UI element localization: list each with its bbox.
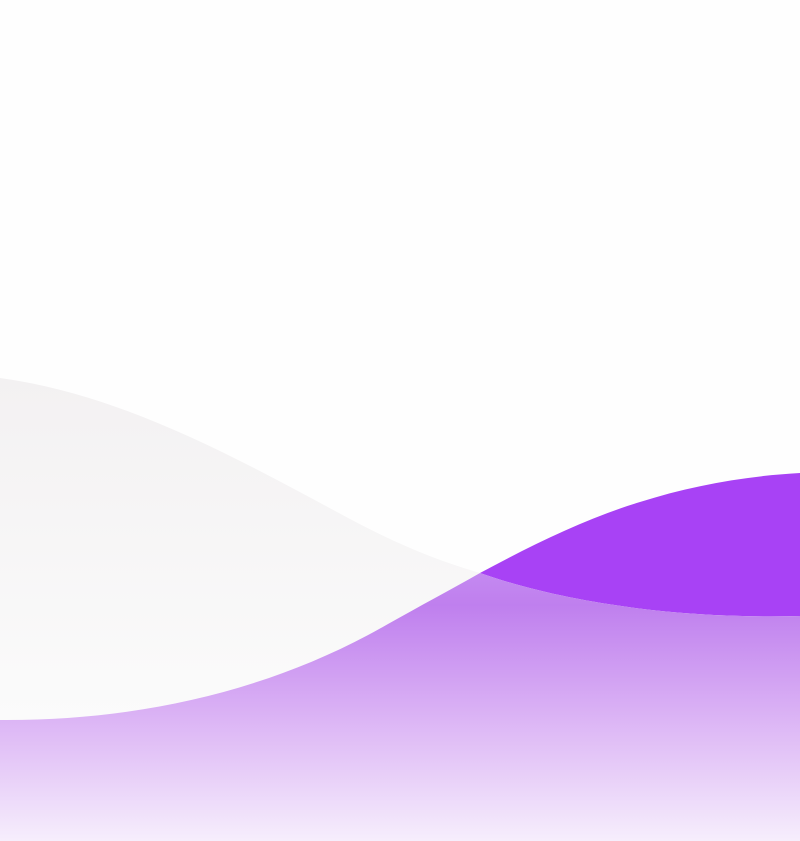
solid purple wave <box>480 473 800 616</box>
grey wave <box>0 378 480 720</box>
lavender gradient wave <box>0 573 800 841</box>
